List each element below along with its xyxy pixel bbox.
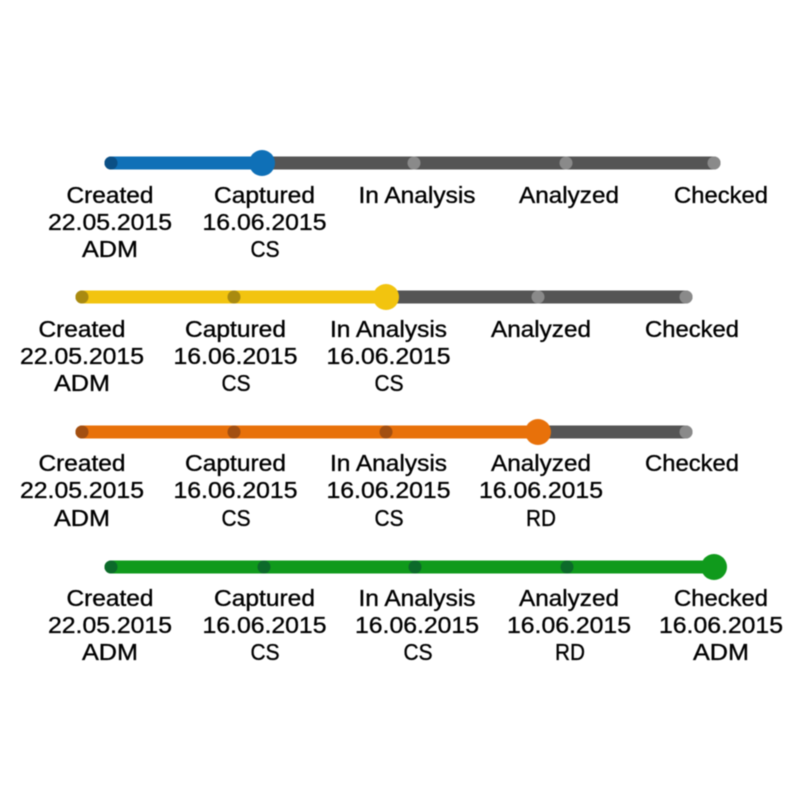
timeline 3: analyzed (orange): Checked xyxy=(645,450,739,476)
timeline 3: analyzed (orange): In Analysis xyxy=(330,450,447,476)
timeline 4: checked (green): ADM xyxy=(693,639,749,665)
timeline 1: captured (blue): ADM xyxy=(82,236,138,262)
timeline 2: in analysis (yellow): 16.06.2015 xyxy=(326,343,450,369)
timeline 1: captured (blue): Checked xyxy=(674,182,768,208)
timeline 2: in analysis (yellow): 16.06.2015 xyxy=(174,343,298,369)
timeline 3: analyzed (orange): 16.06.2015 xyxy=(326,477,450,503)
timeline 4: checked (green): 16.06.2015 xyxy=(355,612,479,638)
timeline 3: analyzed (orange): 16.06.2015 xyxy=(174,477,298,503)
timeline 4: checked (green): Analyzed xyxy=(519,585,619,611)
timeline 1: captured (blue): Analyzed xyxy=(519,182,619,208)
timeline 1: captured (blue): Created xyxy=(66,182,154,208)
timeline 1: captured (blue): CS xyxy=(250,236,280,262)
timeline 4: checked (green): ADM xyxy=(82,639,138,665)
timeline 2: in analysis (yellow): Captured xyxy=(185,316,286,342)
timeline 1: captured (blue) xyxy=(48,150,768,262)
timeline 1: captured (blue): Captured xyxy=(214,182,315,208)
timeline 4: checked (green): 22.05.2015 xyxy=(48,612,172,638)
timeline 3: analyzed (orange): RD xyxy=(526,505,556,531)
timeline 4: checked (green): 16.06.2015 xyxy=(659,612,783,638)
timeline 4: checked (green): Checked xyxy=(674,585,768,611)
timeline 3: analyzed (orange): 16.06.2015 xyxy=(479,477,603,503)
timeline 3: analyzed (orange): CS xyxy=(374,505,404,531)
timeline 4: checked (green): In Analysis xyxy=(358,585,476,611)
timeline 3: analyzed (orange): CS xyxy=(222,505,250,531)
timeline 2: in analysis (yellow): CS xyxy=(374,370,404,396)
timeline 1: captured (blue): In Analysis xyxy=(358,182,476,208)
timeline 3: analyzed (orange): ADM xyxy=(54,505,110,531)
timeline 4: checked (green): Captured xyxy=(214,585,315,611)
timeline 2: in analysis (yellow): ADM xyxy=(54,370,110,396)
timeline 2: in analysis (yellow): In Analysis xyxy=(330,316,447,342)
timeline 3: analyzed (orange): Analyzed xyxy=(491,450,591,476)
timeline 4: checked (green): 16.06.2015 xyxy=(507,612,631,638)
timeline 4: checked (green): CS xyxy=(404,639,432,665)
timeline 2: in analysis (yellow): Created xyxy=(38,316,126,342)
timeline 3: analyzed (orange): 22.05.2015 xyxy=(20,477,144,503)
timeline 2: in analysis (yellow): CS xyxy=(222,370,250,396)
timeline 3: analyzed (orange) xyxy=(20,419,739,531)
timeline 4: checked (green): Created xyxy=(66,585,154,611)
timeline 4: checked (green): 16.06.2015 xyxy=(202,612,326,638)
timeline 4: checked (green): RD xyxy=(555,639,585,665)
timeline 1: captured (blue): 16.06.2015 xyxy=(202,209,326,235)
timeline 2: in analysis (yellow) xyxy=(20,284,739,396)
timeline 3: analyzed (orange): Captured xyxy=(185,450,286,476)
timeline 4: checked (green): CS xyxy=(250,639,280,665)
timeline 1: captured (blue): 22.05.2015 xyxy=(48,209,172,235)
timeline 4: checked (green) xyxy=(48,554,783,665)
timeline 2: in analysis (yellow): Analyzed xyxy=(491,316,591,342)
timeline 2: in analysis (yellow): Checked xyxy=(645,316,739,342)
timeline 3: analyzed (orange): Created xyxy=(38,450,126,476)
timeline 2: in analysis (yellow): 22.05.2015 xyxy=(20,343,144,369)
